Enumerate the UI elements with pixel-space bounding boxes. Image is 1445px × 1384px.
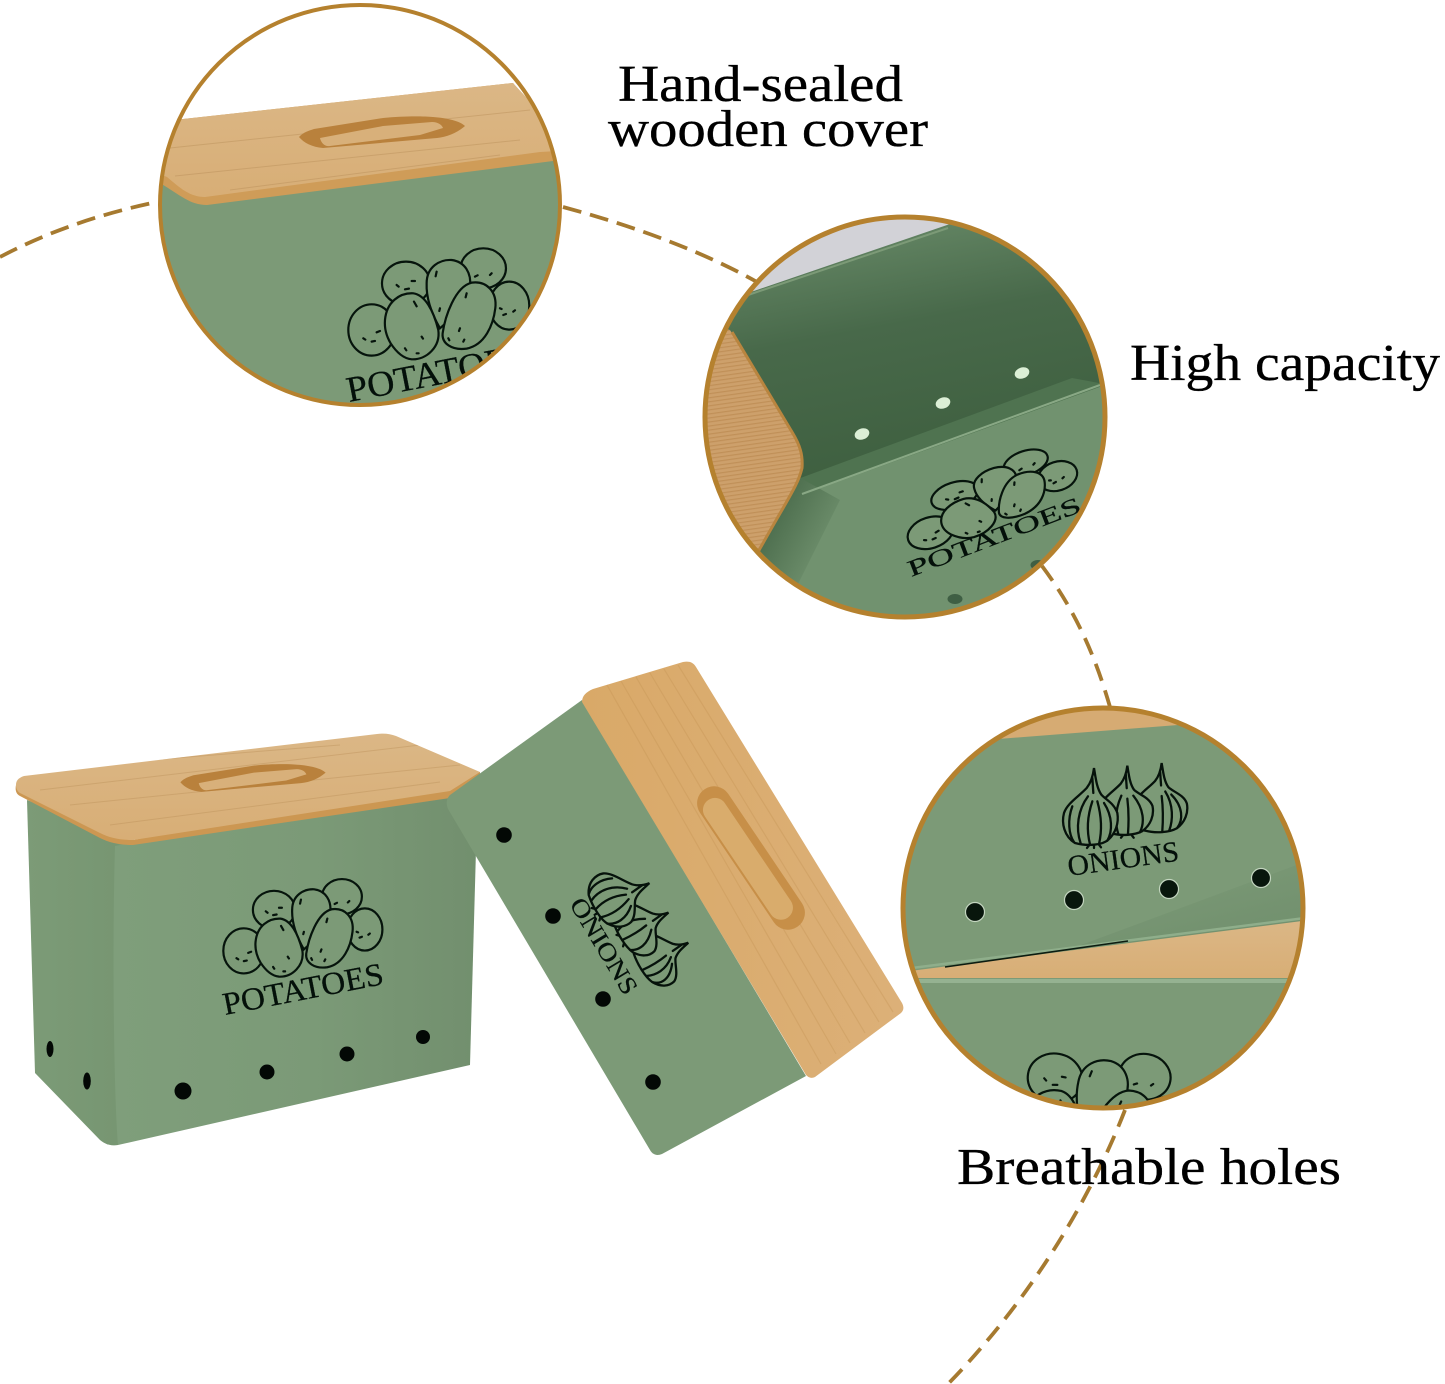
breathable holes	[496, 827, 661, 1090]
bin face	[447, 700, 806, 1155]
lid grain	[170, 110, 530, 190]
bin side face	[27, 800, 140, 1145]
lid edge	[16, 772, 480, 845]
wood edge at top	[1001, 710, 1178, 739]
upper box shading	[1164, 902, 1300, 938]
dashed arc: far left into wooden cover circle	[0, 202, 157, 257]
wood strip between boxes	[910, 920, 1310, 978]
heading: breathable holes: Breathable holes	[957, 1139, 1341, 1196]
breathable holes row	[966, 868, 1270, 922]
bamboo grain	[607, 665, 893, 1064]
lid handle recess	[690, 780, 812, 936]
potato illustration	[223, 879, 382, 977]
panel: breathable holes detail circle	[900, 706, 1306, 1110]
heading: hand-sealed wooden cover	[608, 56, 928, 158]
lid grain	[40, 745, 460, 825]
wooden lid side	[708, 330, 801, 549]
heading: hand-sealed wooden cover: wooden cover	[608, 101, 928, 158]
ONIONS label: ONIONS	[564, 893, 643, 1000]
dashed arc: wooden cover circle to capacity circle	[563, 207, 757, 282]
bin front face	[114, 778, 478, 1145]
front wall	[798, 387, 1102, 614]
onion illustration	[579, 853, 702, 999]
breathable holes	[46, 1030, 430, 1100]
breathable holes seen from inside	[853, 365, 1031, 442]
bamboo lid	[582, 662, 903, 1078]
onion illustration in circle	[1063, 763, 1187, 848]
dashed arc: holes circle to bottom edge	[948, 1110, 1125, 1384]
dashed arc: capacity circle to holes circle	[1042, 566, 1110, 707]
lower box potato illustration	[1026, 1052, 1172, 1106]
heading: high capacity: High capacity	[1130, 335, 1440, 392]
box interior	[728, 224, 1100, 478]
green box front in circle	[162, 161, 558, 403]
product: closed potato bin	[16, 734, 480, 1145]
POTATOES label: POTATOES	[219, 955, 386, 1022]
lid top	[16, 734, 480, 840]
product: tilted onion bin	[447, 662, 903, 1155]
heading: hand-sealed wooden cover: Hand-sealed	[618, 56, 903, 113]
POTATOES label in perspective: POTATOES	[904, 492, 1085, 582]
lower lip	[905, 979, 1305, 983]
ONIONS label in circle: ONIONS	[1066, 836, 1181, 883]
inner lip	[801, 378, 1100, 488]
POTATOES label in circle: POTATOES	[343, 335, 532, 410]
grey background behind box	[752, 220, 948, 292]
front wall shadow by lid	[760, 485, 840, 582]
lid handle recess in circle	[299, 116, 465, 148]
wooden lid in circle	[150, 83, 570, 205]
potato illustration in perspective	[906, 448, 1078, 550]
panel: wooden cover detail circle	[150, 0, 575, 420]
panel: high capacity detail circle	[702, 214, 1108, 620]
lid handle	[180, 764, 326, 792]
potato illustration in circle	[348, 248, 529, 359]
front wall holes	[948, 560, 1046, 604]
